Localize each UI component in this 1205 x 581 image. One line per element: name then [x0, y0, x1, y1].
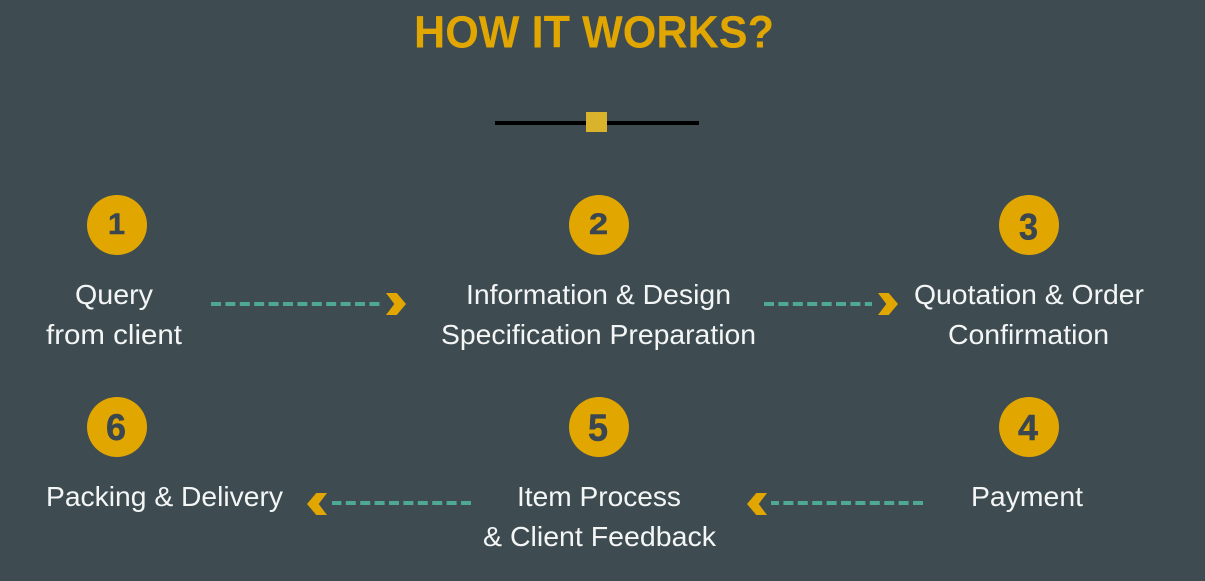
title: HOW IT WORKS?	[414, 6, 774, 58]
step 3: quotation and order confirmation: Confirmation	[948, 319, 1109, 350]
step 1: query from client: 1	[108, 208, 125, 241]
step 3: quotation and order confirmation	[914, 195, 1144, 350]
arrow: step 5 to step 6	[307, 493, 471, 515]
step 2: information and design specification preparation	[441, 195, 756, 350]
step 4: payment	[971, 397, 1083, 512]
arrow: step 1 to step 2	[211, 293, 406, 315]
step 2: information and design specification preparation: Specification Preparation	[441, 319, 756, 350]
step 4: payment: Payment	[971, 481, 1083, 512]
step 2: information and design specification preparation: Information & Design	[466, 279, 731, 310]
step 2: information and design specification preparation: 2	[589, 208, 608, 241]
step 3: quotation and order confirmation: Quotation & Order	[914, 279, 1144, 310]
step 5: item process and client feedback: 5	[588, 408, 608, 450]
title divider with square	[495, 112, 699, 132]
step 4: payment: 4	[1018, 407, 1038, 448]
step 6: packing and delivery: Packing & Delivery	[46, 481, 283, 512]
step 1: query from client: Query	[75, 279, 153, 310]
arrow: step 4 to step 5	[747, 493, 923, 515]
step 6: packing and delivery	[46, 397, 283, 512]
step 5: item process and client feedback: & Client Feedback	[483, 521, 717, 552]
step 5: item process and client feedback	[483, 397, 717, 552]
step 1: query from client: from client	[46, 319, 182, 350]
step 1: query from client	[46, 195, 182, 350]
step 5: item process and client feedback: Item Process	[517, 481, 681, 512]
step 6: packing and delivery: 6	[106, 407, 126, 448]
step 3: quotation and order confirmation: 3	[1019, 206, 1038, 248]
arrow: step 2 to step 3	[764, 293, 898, 315]
